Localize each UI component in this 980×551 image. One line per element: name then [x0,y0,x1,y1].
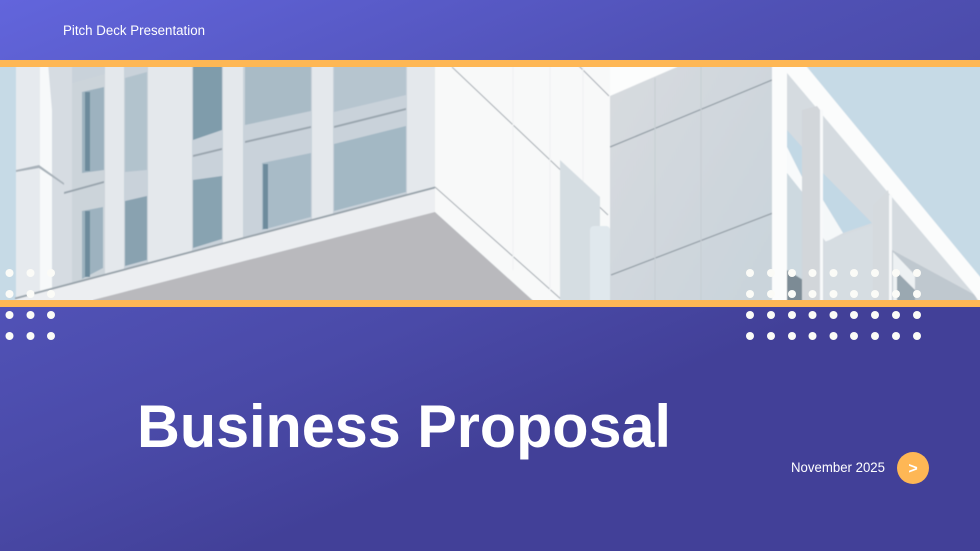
diagonal beam and right frame [786,67,980,300]
wall behind the windows [72,67,406,268]
left columns [16,67,72,298]
bottom orange band [0,300,980,307]
white side face [434,67,610,300]
next button [897,452,929,484]
next button: > [908,460,918,478]
right white column [771,67,788,300]
top orange band [0,60,980,67]
header label: Pitch Deck Presentation [63,23,205,38]
central block [610,67,772,300]
photo: white building against the sky [0,67,980,300]
windows [82,67,406,279]
upright columns [104,67,435,274]
date: November 2025 [791,460,885,475]
window ledges [64,108,406,194]
dots: left grid [6,269,55,340]
dots: right grid [746,269,921,340]
parapet and gray soffit [14,186,532,300]
title: Business Proposal [137,393,671,460]
